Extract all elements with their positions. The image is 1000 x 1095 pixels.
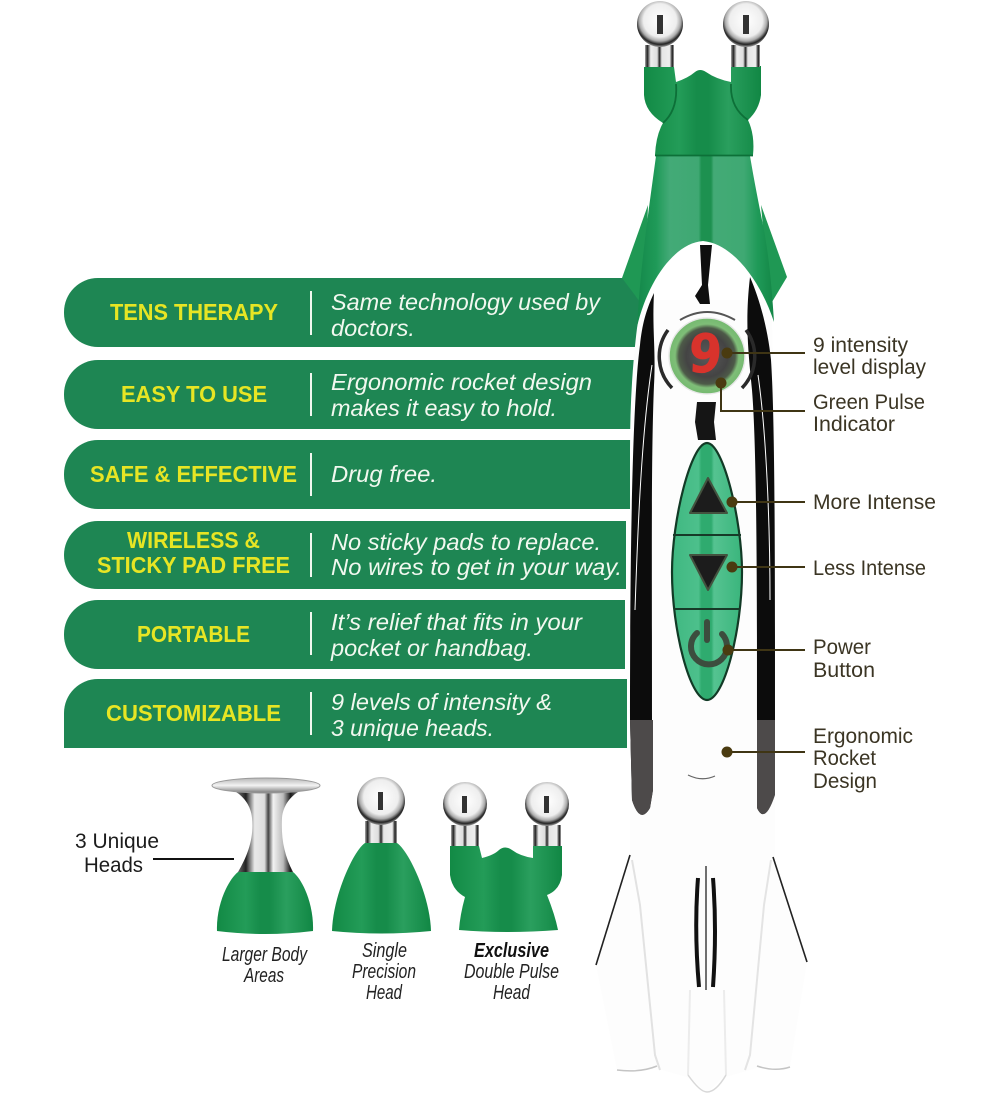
- icon: down arrow: [690, 555, 727, 590]
- heading: TENS Therapy: TENS THERAPY: [110, 299, 278, 325]
- heading: Portable: PORTABLE: [137, 621, 250, 647]
- text: Easy to Use benefit: [331, 369, 592, 421]
- callout: Green Pulse Indicator: [813, 391, 925, 436]
- caption: single precision head: Single: [362, 940, 407, 962]
- text: Wireless benefit: No wires to get in your way.: [331, 554, 622, 580]
- caption: exclusive double pulse head: Head: [493, 982, 531, 1004]
- device green nose collar: [637, 156, 774, 327]
- callout: Less Intense: Less Intense: [813, 557, 926, 580]
- callout: More Intense: More Intense: [813, 491, 936, 514]
- text: TENS Therapy benefit: [331, 289, 602, 341]
- caption: single precision head: Precision: [352, 961, 416, 983]
- head: single precision: [332, 777, 431, 934]
- text: Customizable benefit: [331, 689, 552, 741]
- caption: larger body areas: [222, 944, 308, 987]
- caption: exclusive double pulse head: Exclusive: [474, 940, 549, 962]
- device: rocket massager: [596, 1, 807, 1093]
- text: Customizable benefit: 9 levels of intensity &: [331, 689, 552, 715]
- label: 3 Unique Heads: 3 Unique: [75, 830, 159, 853]
- text: Easy to Use benefit: Ergonomic rocket design: [331, 369, 592, 395]
- heading: Wireless and Sticky Pad Free: [97, 527, 290, 578]
- device chrome collars: [645, 45, 760, 67]
- callout: Power Button: Button: [813, 659, 875, 682]
- intensity display: [659, 312, 755, 394]
- device head with double pulse arms: [644, 66, 761, 155]
- panel: Portable: [64, 600, 625, 669]
- panel: Wireless and Sticky Pad Free: [64, 521, 626, 589]
- panel: TENS Therapy: [64, 278, 640, 347]
- device lower details: [596, 775, 807, 1092]
- label: 3 Unique Heads: Heads: [84, 854, 143, 877]
- icon: power symbol: [691, 622, 727, 664]
- head: larger body areas: [212, 778, 320, 934]
- caption: larger body areas: Areas: [243, 965, 284, 987]
- device green fins: [622, 205, 787, 302]
- heading: Wireless and Sticky Pad Free: WIRELESS &: [127, 527, 260, 553]
- caption: larger body areas: Larger Body: [222, 944, 308, 966]
- head: double pulse: [443, 782, 569, 932]
- panel: Easy to Use: [64, 360, 636, 429]
- device silver body: [596, 300, 807, 1093]
- head arm creases: [655, 84, 753, 156]
- text: Portable benefit: pocket or handbag.: [330, 635, 533, 661]
- panel: Customizable: [64, 679, 627, 748]
- text: Wireless benefit: No sticky pads to replace.: [331, 529, 601, 555]
- text: TENS Therapy benefit: doctors.: [331, 315, 415, 341]
- caption: single precision head: [352, 940, 416, 1004]
- device chrome bands: [630, 245, 775, 815]
- caption: exclusive double pulse head: Double Pulse: [464, 961, 559, 983]
- callout: Ergonomic Rocket Design: Design: [813, 770, 877, 793]
- callout: Power Button: [813, 636, 875, 682]
- text: Wireless benefit: [331, 529, 622, 580]
- text: Portable benefit: It’s relief that fits in your: [331, 609, 583, 635]
- callout lines and dots: [716, 348, 805, 758]
- caption: single precision head: Head: [366, 982, 403, 1004]
- icon: up arrow: [690, 478, 727, 513]
- device chrome balls: [637, 1, 769, 47]
- panel: Safe and Effective: [64, 440, 632, 509]
- callout: Green Pulse Indicator: Indicator: [813, 413, 895, 436]
- digit 9: 9: [687, 323, 724, 385]
- heading: Safe and Effective: SAFE & EFFECTIVE: [90, 461, 297, 487]
- text: Portable benefit: [330, 609, 583, 661]
- text: TENS Therapy benefit: Same technology used by: [331, 289, 602, 315]
- label: 3 Unique Heads: [75, 830, 234, 877]
- callout: 9 intensity level display: level display: [813, 356, 926, 379]
- callout: Green Pulse Indicator: Green Pulse: [813, 391, 925, 414]
- text: Safe and Effective benefit: Drug free.: [331, 461, 437, 487]
- callout: Ergonomic Rocket Design: Ergonomic: [813, 725, 913, 748]
- callout: Power Button: Power: [813, 636, 871, 659]
- heading: Easy to Use: EASY TO USE: [121, 381, 267, 407]
- heading: Wireless and Sticky Pad Free: STICKY PAD FREE: [97, 552, 290, 578]
- callout: Ergonomic Rocket Design: [813, 725, 913, 793]
- caption: exclusive double pulse head: [464, 940, 559, 1004]
- callout: Ergonomic Rocket Design: Rocket: [813, 747, 876, 770]
- text: Customizable benefit: 3 unique heads.: [331, 715, 494, 741]
- heading: Customizable: CUSTOMIZABLE: [106, 700, 281, 726]
- callout: 9 intensity level display: 9 intensity: [813, 334, 908, 357]
- control buttons oval: [672, 443, 742, 700]
- text: Easy to Use benefit: makes it easy to hold.: [331, 395, 557, 421]
- callout: 9 intensity level display: [813, 334, 926, 379]
